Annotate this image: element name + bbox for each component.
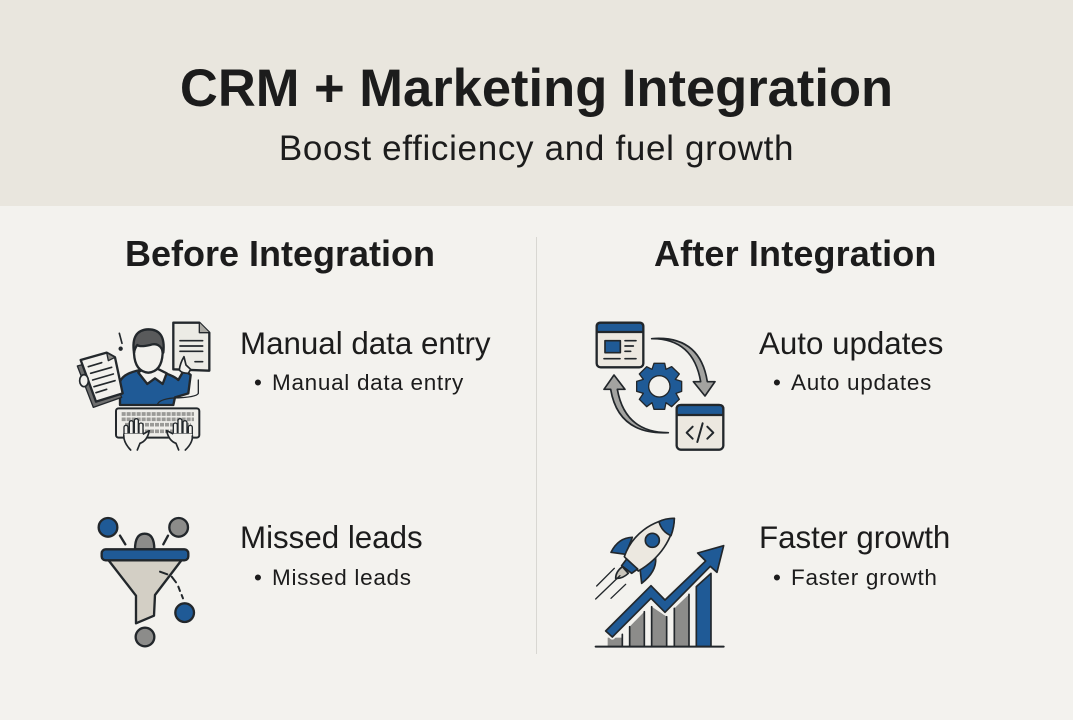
title: CRM + Marketing Integration xyxy=(180,59,893,118)
heading: after integration: After Integration xyxy=(654,233,937,274)
bullet: auto updates: Auto updates xyxy=(791,370,932,395)
bullet: auto updates: • xyxy=(773,370,781,395)
bullet: missed leads: Missed leads xyxy=(272,565,412,590)
icon: leaking funnel xyxy=(99,518,194,646)
icon: person doing manual data entry xyxy=(77,323,209,450)
label: auto updates: Auto updates xyxy=(759,326,943,361)
bullet: missed leads: • xyxy=(254,565,262,590)
label: faster growth: Faster growth xyxy=(759,520,950,555)
icon: auto sync with gear xyxy=(597,323,723,450)
heading: before integration: Before Integration xyxy=(125,233,435,274)
icon: rocket and growth chart xyxy=(596,518,724,647)
bullet: faster growth: Faster growth xyxy=(791,565,938,590)
header band xyxy=(0,0,1073,206)
bullet: manual data entry: Manual data entry xyxy=(272,370,464,395)
subtitle: Boost efficiency and fuel growth xyxy=(279,129,794,168)
label: manual data entry: Manual data entry xyxy=(240,326,491,361)
label: missed leads: Missed leads xyxy=(240,520,423,555)
bullet: faster growth: • xyxy=(773,565,781,590)
bullet: manual data entry: • xyxy=(254,370,262,395)
column divider xyxy=(536,237,537,654)
